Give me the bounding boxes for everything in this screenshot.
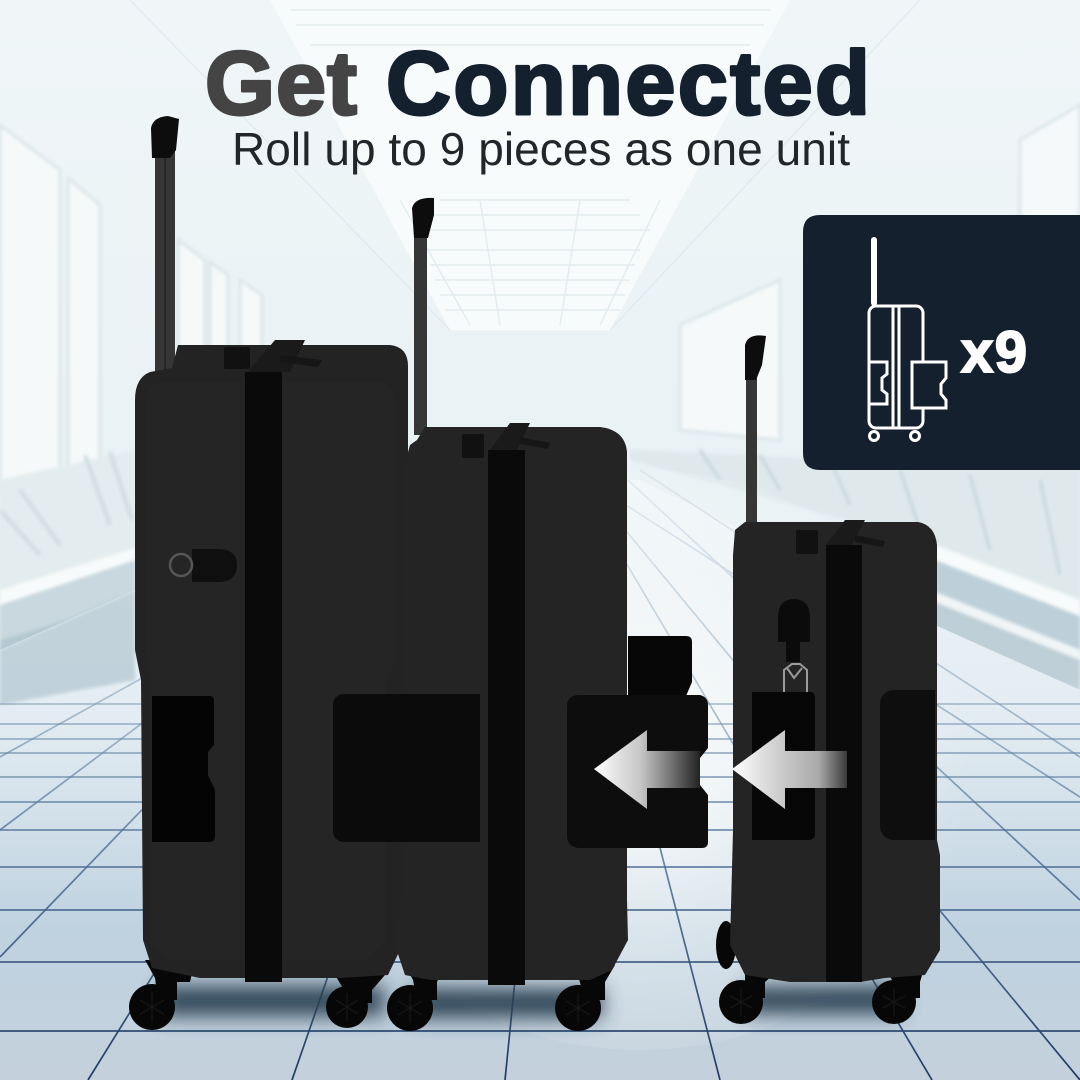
left seats: [0, 450, 135, 660]
telescoping handle: [151, 116, 179, 375]
right seats: [630, 450, 1080, 690]
side handle: [170, 549, 237, 582]
connector slot: [152, 696, 215, 842]
floor shadows: [160, 986, 900, 1018]
floor reflection left: [0, 590, 135, 705]
floor tiles: [0, 470, 1080, 1080]
arrow: right connector: [732, 730, 847, 809]
subtitle: Roll up to 9 pieces as one unit: [232, 123, 850, 175]
title: Get: [205, 34, 357, 134]
medium suitcase: [333, 198, 708, 1031]
left wall windows: [0, 105, 1080, 490]
wheels: [129, 960, 385, 1030]
title: Connected: [386, 34, 870, 134]
arrow: left connector: [594, 730, 700, 809]
small suitcase: [716, 335, 940, 1024]
wheels: [387, 965, 615, 1031]
ceiling light panel: [270, 0, 790, 330]
wheels: [716, 921, 925, 1024]
panel: x9 badge: [803, 215, 1080, 470]
large suitcase: [129, 116, 408, 1030]
connector plate: right top: [628, 636, 692, 696]
body: [135, 345, 408, 978]
connector plate: left: [333, 694, 480, 842]
label: x9: x9: [961, 320, 1027, 385]
icon: suitcase outline: [869, 237, 946, 440]
connector plate: right: [567, 695, 708, 848]
floor: [0, 480, 1080, 1080]
